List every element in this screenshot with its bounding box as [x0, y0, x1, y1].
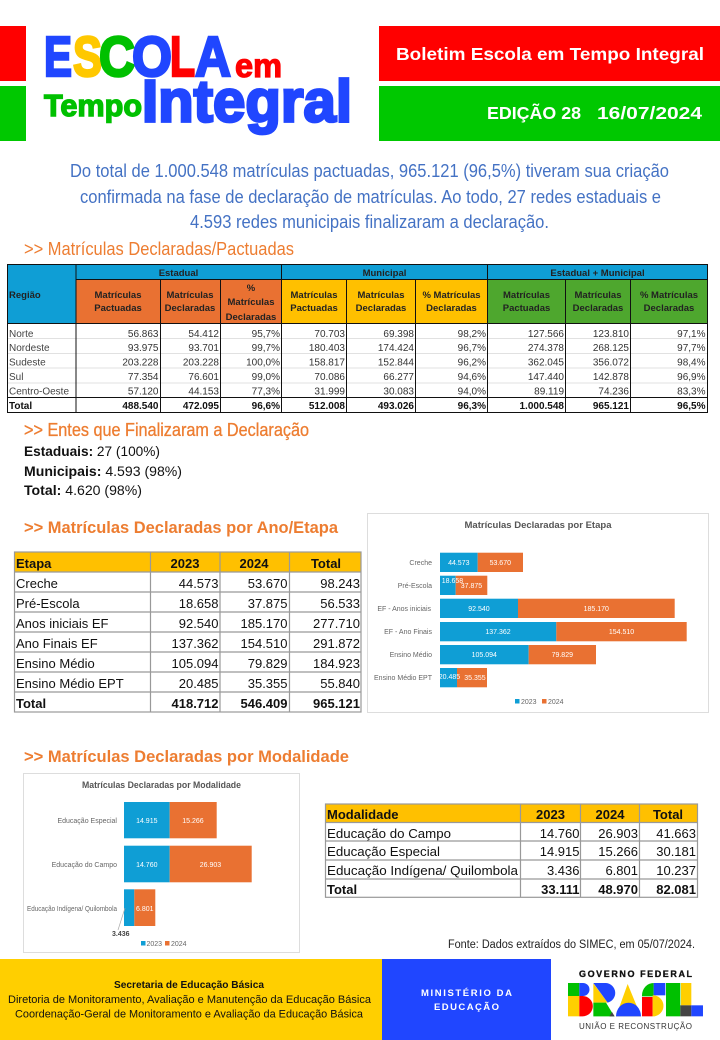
table: matrículas por etapa: 2024 [240, 556, 269, 571]
heading: Matrículas Declaradas por Modalidade: >> Matrículas Declaradas por Modalidade [24, 747, 349, 766]
table rows: regiões: Centro-Oeste [9, 386, 69, 398]
table: matrículas por etapa: 546.409 [240, 696, 288, 711]
table: matrículas por etapa: 20.485 [179, 676, 218, 691]
table: matrículas por etapa: 154.510 [240, 636, 288, 651]
intro text: Do total de 1.000.548 matrículas pactuadas, 965.121 (96,5%) tiveram sua criação [70, 161, 669, 181]
table: matrículas por etapa: 105.094 [172, 656, 218, 671]
table rows: regiões: 180.403 [309, 343, 345, 354]
table rows: regiões: 57.120 [128, 386, 159, 398]
table rows: regiões: Sudeste [9, 358, 46, 368]
table rows: regiões: Sul [9, 372, 23, 383]
table header fills: Municipal [363, 268, 406, 279]
footer panel: Secretaria de Educação Básica [0, 959, 382, 1040]
table rows: regiões: 96,7% [458, 343, 486, 354]
bar: Ensino Médio: 105.094 [472, 652, 497, 659]
table: matrículas por etapa: 185.170 [240, 616, 288, 631]
chart legend: 2023 [521, 699, 537, 706]
table rows: regiões: 94,6% [458, 372, 486, 383]
logo: Escola em Tempo Integral: E [44, 25, 72, 89]
table: matrículas por etapa: 79.829 [248, 656, 288, 671]
table: matrículas por região [7, 264, 708, 412]
bar: EF - Ano Finais: EF - Ano Finais [384, 629, 432, 636]
table: matrículas por modalidade [325, 804, 698, 897]
bar: Pré-Escola: Pré-Escola [398, 583, 432, 590]
table rows: regiões: 93.701 [188, 343, 219, 354]
text block: entes finalizados [24, 443, 182, 498]
table rows: regiões: 152.844 [378, 358, 414, 368]
table: matrículas por etapa: Ano Finais EF [16, 636, 98, 651]
table: matrículas por modalidade: 2024 [596, 807, 625, 822]
table rows: regiões: 89.119 [534, 386, 564, 398]
table rows: regiões: 127.566 [528, 329, 564, 340]
table row: total: Total [9, 401, 32, 412]
table: matrículas por modalidade: Modalidade [327, 807, 399, 822]
bar: Educação Indígena/Quilombola: Educação Indígena/ Quilombola [27, 906, 117, 913]
table header fills: Matrículas [574, 290, 622, 301]
table: matrículas por modalidade: 30.181 [656, 844, 696, 859]
table rows: regiões: 83,3% [677, 386, 706, 398]
table rows: regiões: 77.354 [128, 372, 159, 383]
table row: total: 472.095 [183, 401, 219, 412]
bar: Educação Especial: Educação Especial [57, 818, 117, 825]
table header fills [7, 264, 708, 324]
logo: Escola em Tempo Integral: O [132, 25, 172, 89]
logo: Escola em Tempo Integral: A [195, 25, 231, 89]
table header fills: Pactuadas [290, 303, 338, 314]
table rows: regiões: 94,0% [458, 386, 486, 398]
bar: EF - Anos iniciais: 92.540 [468, 606, 490, 613]
table header fills: Matrículas [166, 290, 214, 301]
table rows: regiões: 203.228 [122, 358, 159, 368]
table: matrículas por modalidade: 10.237 [656, 863, 696, 878]
table: matrículas por etapa: 184.923 [313, 656, 360, 671]
table: matrículas por etapa: 53.670 [248, 576, 288, 591]
footer panel: Ministério da Educação: EDUCAÇÃO [434, 1002, 499, 1013]
table row: total: 1.000.548 [520, 401, 564, 412]
table: matrículas por modalidade: 41.663 [656, 826, 696, 841]
bar: EF - Ano Finais [384, 622, 687, 641]
chart legend: 2024 [548, 699, 564, 706]
table header fills: Declaradas [426, 303, 477, 314]
table: matrículas por modalidade: 82.081 [656, 882, 696, 897]
table: matrículas por modalidade: 3.436 [547, 863, 580, 878]
intro text: confirmada na fase de declaração de matrículas. Ao todo, 27 redes estaduais e [80, 187, 661, 207]
footer panel: Secretaria de Educação Básica: Coordenação-Geral de Monitoramento e Avaliação da Educação Básica [15, 1008, 364, 1020]
bar: Educação do Campo: 14.760 [136, 862, 158, 869]
header banner: edition and date: EDIÇÃO 28 [487, 102, 581, 123]
bar: Educação do Campo: Educação do Campo [52, 862, 117, 869]
table rows: regiões [9, 329, 706, 398]
bar: Educação Indígena/Quilombola: 6.801 [136, 906, 154, 913]
logo: Escola em Tempo Integral: em [235, 47, 282, 84]
bar: Ensino Médio EPT: 35.355 [464, 675, 486, 682]
chart legend [141, 941, 187, 948]
table rows: regiões: 362.045 [528, 358, 564, 368]
table: matrículas por etapa: Total [16, 696, 46, 711]
table rows: regiões: 356.072 [593, 358, 629, 368]
table: matrículas por etapa: 418.712 [172, 696, 218, 711]
bar: Educação Especial [57, 802, 217, 838]
bar: Ensino Médio: 79.829 [552, 652, 573, 659]
table rows: regiões: 158.817 [309, 358, 345, 368]
table rows: regiões: 70.703 [314, 329, 345, 340]
table rows: regiões: 97,1% [677, 329, 706, 340]
table: matrículas por etapa: Ensino Médio EPT [16, 676, 124, 691]
table rows: regiões: 54.412 [188, 329, 219, 340]
intro text: 4.593 redes municipais finalizaram a declaração. [190, 212, 549, 232]
table header fills: Matrículas [290, 290, 338, 301]
table: matrículas por modalidade: Educação Especial [327, 844, 440, 859]
table header fills: Estadual + Municipal [550, 268, 645, 279]
bar: Educação Especial: 15.266 [182, 818, 204, 825]
table row: total: 488.540 [122, 401, 159, 412]
table: matrículas por etapa: 55.840 [320, 676, 360, 691]
table header fills: Região [9, 290, 41, 301]
table rows: regiões: 142.878 [593, 372, 629, 383]
chart: Matrículas Declaradas por Modalidade [24, 774, 300, 952]
table: matrículas por modalidade: 6.801 [605, 863, 638, 878]
logo: Escola em Tempo Integral: C [99, 25, 135, 89]
table: matrículas por modalidade: Educação do Campo [327, 826, 451, 841]
bar: Ensino Médio: Ensino Médio [390, 652, 432, 659]
bar: Pré-Escola [398, 576, 487, 595]
table: matrículas por etapa: 18.658 [179, 596, 218, 611]
intro text [70, 161, 669, 232]
bar: Creche: 44.573 [448, 560, 470, 567]
table header fills: % Matrículas [640, 290, 698, 301]
bar: EF - Anos iniciais: EF - Anos iniciais [377, 606, 431, 613]
table rows: regiões: 174.424 [378, 343, 414, 354]
table header fills: Matrículas [358, 290, 404, 301]
table rows: regiões: 95,7% [252, 329, 280, 340]
table rows: regiões: 56.863 [128, 329, 159, 340]
table header fills: Declaradas [573, 303, 623, 314]
table: matrículas por etapa: Anos iniciais EF [16, 616, 109, 631]
bar: Educação Indígena/Quilombola [27, 889, 155, 938]
table rows: regiões: 77,3% [252, 386, 280, 398]
table row: total: 96,6% [252, 401, 280, 412]
chart: Matrículas Declaradas por Modalidade: Matrículas Declaradas por Modalidade [82, 780, 241, 790]
table: matrículas por etapa: 37.875 [248, 596, 288, 611]
table header fills: Declaradas [356, 303, 406, 314]
table: matrículas por modalidade: 48.970 [598, 882, 638, 897]
table row: total: 512.008 [309, 401, 345, 412]
heading: Entes que Finalizaram a Declaração: >> Entes que Finalizaram a Declaração [24, 420, 309, 440]
bar: Pré-Escola: 37.875 [461, 583, 482, 590]
header banner: edition and date: 16/07/2024 [597, 103, 702, 123]
table row: total: 965.121 [593, 401, 629, 412]
table: matrículas por modalidade: 15.266 [598, 844, 638, 859]
logo: Governo Federal Brasil [568, 969, 703, 1031]
table: matrículas por etapa: 965.121 [313, 696, 360, 711]
logo: Governo Federal Brasil: GOVERNO FEDERAL [579, 969, 692, 979]
bar: Educação Indígena/Quilombola: 3.436 [112, 931, 130, 938]
table row: total: 96,5% [677, 401, 706, 412]
table: matrículas por etapa: 35.355 [248, 676, 288, 691]
table rows: regiões: 98,4% [677, 358, 706, 368]
logo: Governo Federal Brasil: UNIÃO E RECONSTRUÇÃO [579, 1022, 692, 1031]
logo: Escola em Tempo Integral: Integral [142, 68, 352, 134]
chart: Matrículas Declaradas por Etapa: Matrículas Declaradas por Etapa [464, 520, 613, 530]
table: matrículas por modalidade: Total [327, 882, 357, 897]
table header fills: Matrículas [228, 297, 274, 308]
table header fills: Declaradas [165, 303, 215, 314]
header banner: bulletin title [379, 26, 720, 81]
bar: EF - Ano Finais: 154.510 [609, 629, 634, 636]
table rows: regiões: 274.378 [528, 343, 564, 354]
bar: EF - Anos iniciais: 185.170 [584, 606, 609, 613]
table rows: regiões: 66.277 [383, 372, 414, 383]
table rows: regiões: 93.975 [128, 343, 159, 354]
header accent: left colour blocks [0, 26, 26, 141]
table: matrículas por etapa: 44.573 [179, 576, 218, 591]
source note: Fonte: Dados extraídos do SIMEC, em 05/07/2024. [448, 939, 695, 951]
bar: Pré-Escola: 18.658 [442, 578, 463, 585]
header banner: bulletin title: Boletim Escola em Tempo Integral [396, 44, 704, 64]
table: matrículas por etapa: Pré-Escola [16, 596, 80, 611]
logo: Escola em Tempo Integral: L [170, 25, 195, 89]
table header fills: Matrículas [503, 290, 550, 301]
bar: EF - Anos iniciais [377, 599, 675, 618]
logo mark: BRASIL [568, 983, 703, 1016]
table rows: regiões: 96,9% [677, 372, 706, 383]
table rows: regiões: 123.810 [593, 329, 629, 340]
table: matrículas por etapa: 137.362 [172, 636, 218, 651]
table header fills: % [247, 283, 256, 294]
bar: Creche: Creche [409, 560, 432, 567]
chart legend: 2023 [146, 941, 162, 948]
table header fills: Matrículas [94, 290, 142, 301]
table header fills: Pactuadas [503, 303, 550, 314]
footer panel: Ministério da Educação: MINISTÉRIO DA [421, 988, 512, 999]
table rows: regiões: 30.083 [383, 386, 414, 398]
table: matrículas por modalidade: 26.903 [598, 826, 638, 841]
table: matrículas por etapa: 92.540 [179, 616, 218, 631]
table: matrículas por modalidade: 33.111 [541, 882, 580, 897]
table rows: regiões: 98,2% [458, 329, 486, 340]
table: matrículas por etapa: Creche [16, 576, 58, 591]
chart: Matrículas Declaradas por Etapa [368, 514, 708, 712]
table rows: regiões: Norte [9, 329, 34, 340]
table header fills: Declaradas [226, 312, 276, 323]
table: matrículas por etapa: Etapa [16, 556, 52, 571]
footer panel: Secretaria de Educação Básica: Diretoria de Monitoramento, Avaliação e Manutenção da Educação Básica [8, 994, 372, 1006]
table rows: regiões: 97,7% [677, 343, 706, 354]
footer panel: Ministério da Educação [382, 959, 551, 1040]
bar: EF - Ano Finais: 137.362 [485, 629, 511, 636]
heading: Matrículas Declaradas por Ano/Etapa: >> Matrículas Declaradas por Ano/Etapa [24, 518, 339, 537]
table rows: regiões: 69.398 [383, 329, 414, 340]
table: matrículas por modalidade: 14.915 [540, 844, 580, 859]
table rows: regiões: 268.125 [593, 343, 629, 354]
chart legend: 2024 [171, 941, 187, 948]
bar: Ensino Médio EPT [374, 668, 487, 687]
table: matrículas por modalidade: 2023 [536, 807, 565, 822]
table header fills: Pactuadas [94, 303, 142, 314]
table rows: regiões: Nordeste [9, 343, 50, 354]
bar: Ensino Médio [390, 645, 596, 664]
bar: Educação Especial: 14.915 [136, 818, 158, 825]
table rows: regiões: 99,7% [252, 343, 280, 354]
table row: total [9, 401, 706, 412]
footer panel: Secretaria de Educação Básica: Secretaria de Educação Básica [114, 979, 264, 991]
table header fills: % Matrículas [422, 290, 481, 301]
table rows: regiões: 100,0% [246, 358, 280, 368]
text block: entes finalizados: Total: 4.620 (98%) [24, 482, 142, 498]
logo: Escola em Tempo Integral: S [73, 25, 102, 89]
table: matrículas por modalidade: Educação Indígena/ Quilombola [327, 863, 519, 878]
heading: Matrículas Declaradas/Pactuadas: >> Matrículas Declaradas/Pactuadas [24, 239, 294, 259]
bar: Creche [409, 553, 523, 572]
table rows: regiões: 147.440 [528, 372, 564, 383]
table header fills: Declaradas [644, 303, 694, 314]
table: matrículas por modalidade: Total [653, 807, 683, 822]
header banner: edition and date [379, 86, 720, 141]
table row: total: 96,3% [458, 401, 486, 412]
table: matrículas por etapa: Ensino Médio [16, 656, 95, 671]
table: matrículas por etapa: 277.710 [313, 616, 360, 631]
table row: total: 493.026 [378, 401, 414, 412]
table header fills: Estadual [159, 268, 198, 279]
table: matrículas por etapa [14, 552, 361, 712]
bar: Creche: 53.670 [490, 560, 511, 567]
chart legend [515, 699, 564, 706]
text block: entes finalizados: Municipais: 4.593 (98%) [24, 463, 182, 479]
table rows: regiões: 74.236 [598, 386, 629, 398]
table rows: regiões: 99,0% [252, 372, 280, 383]
table rows: regiões: 76.601 [188, 372, 219, 383]
bar: Educação do Campo [52, 846, 252, 882]
table: matrículas por etapa: 2023 [171, 556, 199, 571]
table rows: regiões: 31.999 [314, 386, 345, 398]
text block: entes finalizados: Estaduais: 27 (100%) [24, 443, 160, 459]
table: matrículas por etapa: 56.533 [320, 596, 360, 611]
table: matrículas por modalidade: 14.760 [540, 826, 580, 841]
table: matrículas por etapa: 291.872 [313, 636, 360, 651]
table rows: regiões: 70.086 [314, 372, 345, 383]
table: matrículas por etapa: Total [311, 556, 341, 571]
bar: Educação do Campo: 26.903 [200, 862, 221, 869]
table rows: regiões: 96,2% [458, 358, 486, 368]
table rows: regiões: 44.153 [188, 386, 219, 398]
logo: Escola em Tempo Integral: Tempo [44, 88, 142, 123]
bar: Ensino Médio EPT: 20.485 [439, 674, 460, 681]
bar: Ensino Médio EPT: Ensino Médio EPT [374, 675, 433, 682]
table rows: regiões: 203.228 [183, 358, 219, 368]
logo: Escola em Tempo Integral [44, 25, 352, 134]
table: matrículas por etapa: 98.243 [320, 576, 360, 591]
